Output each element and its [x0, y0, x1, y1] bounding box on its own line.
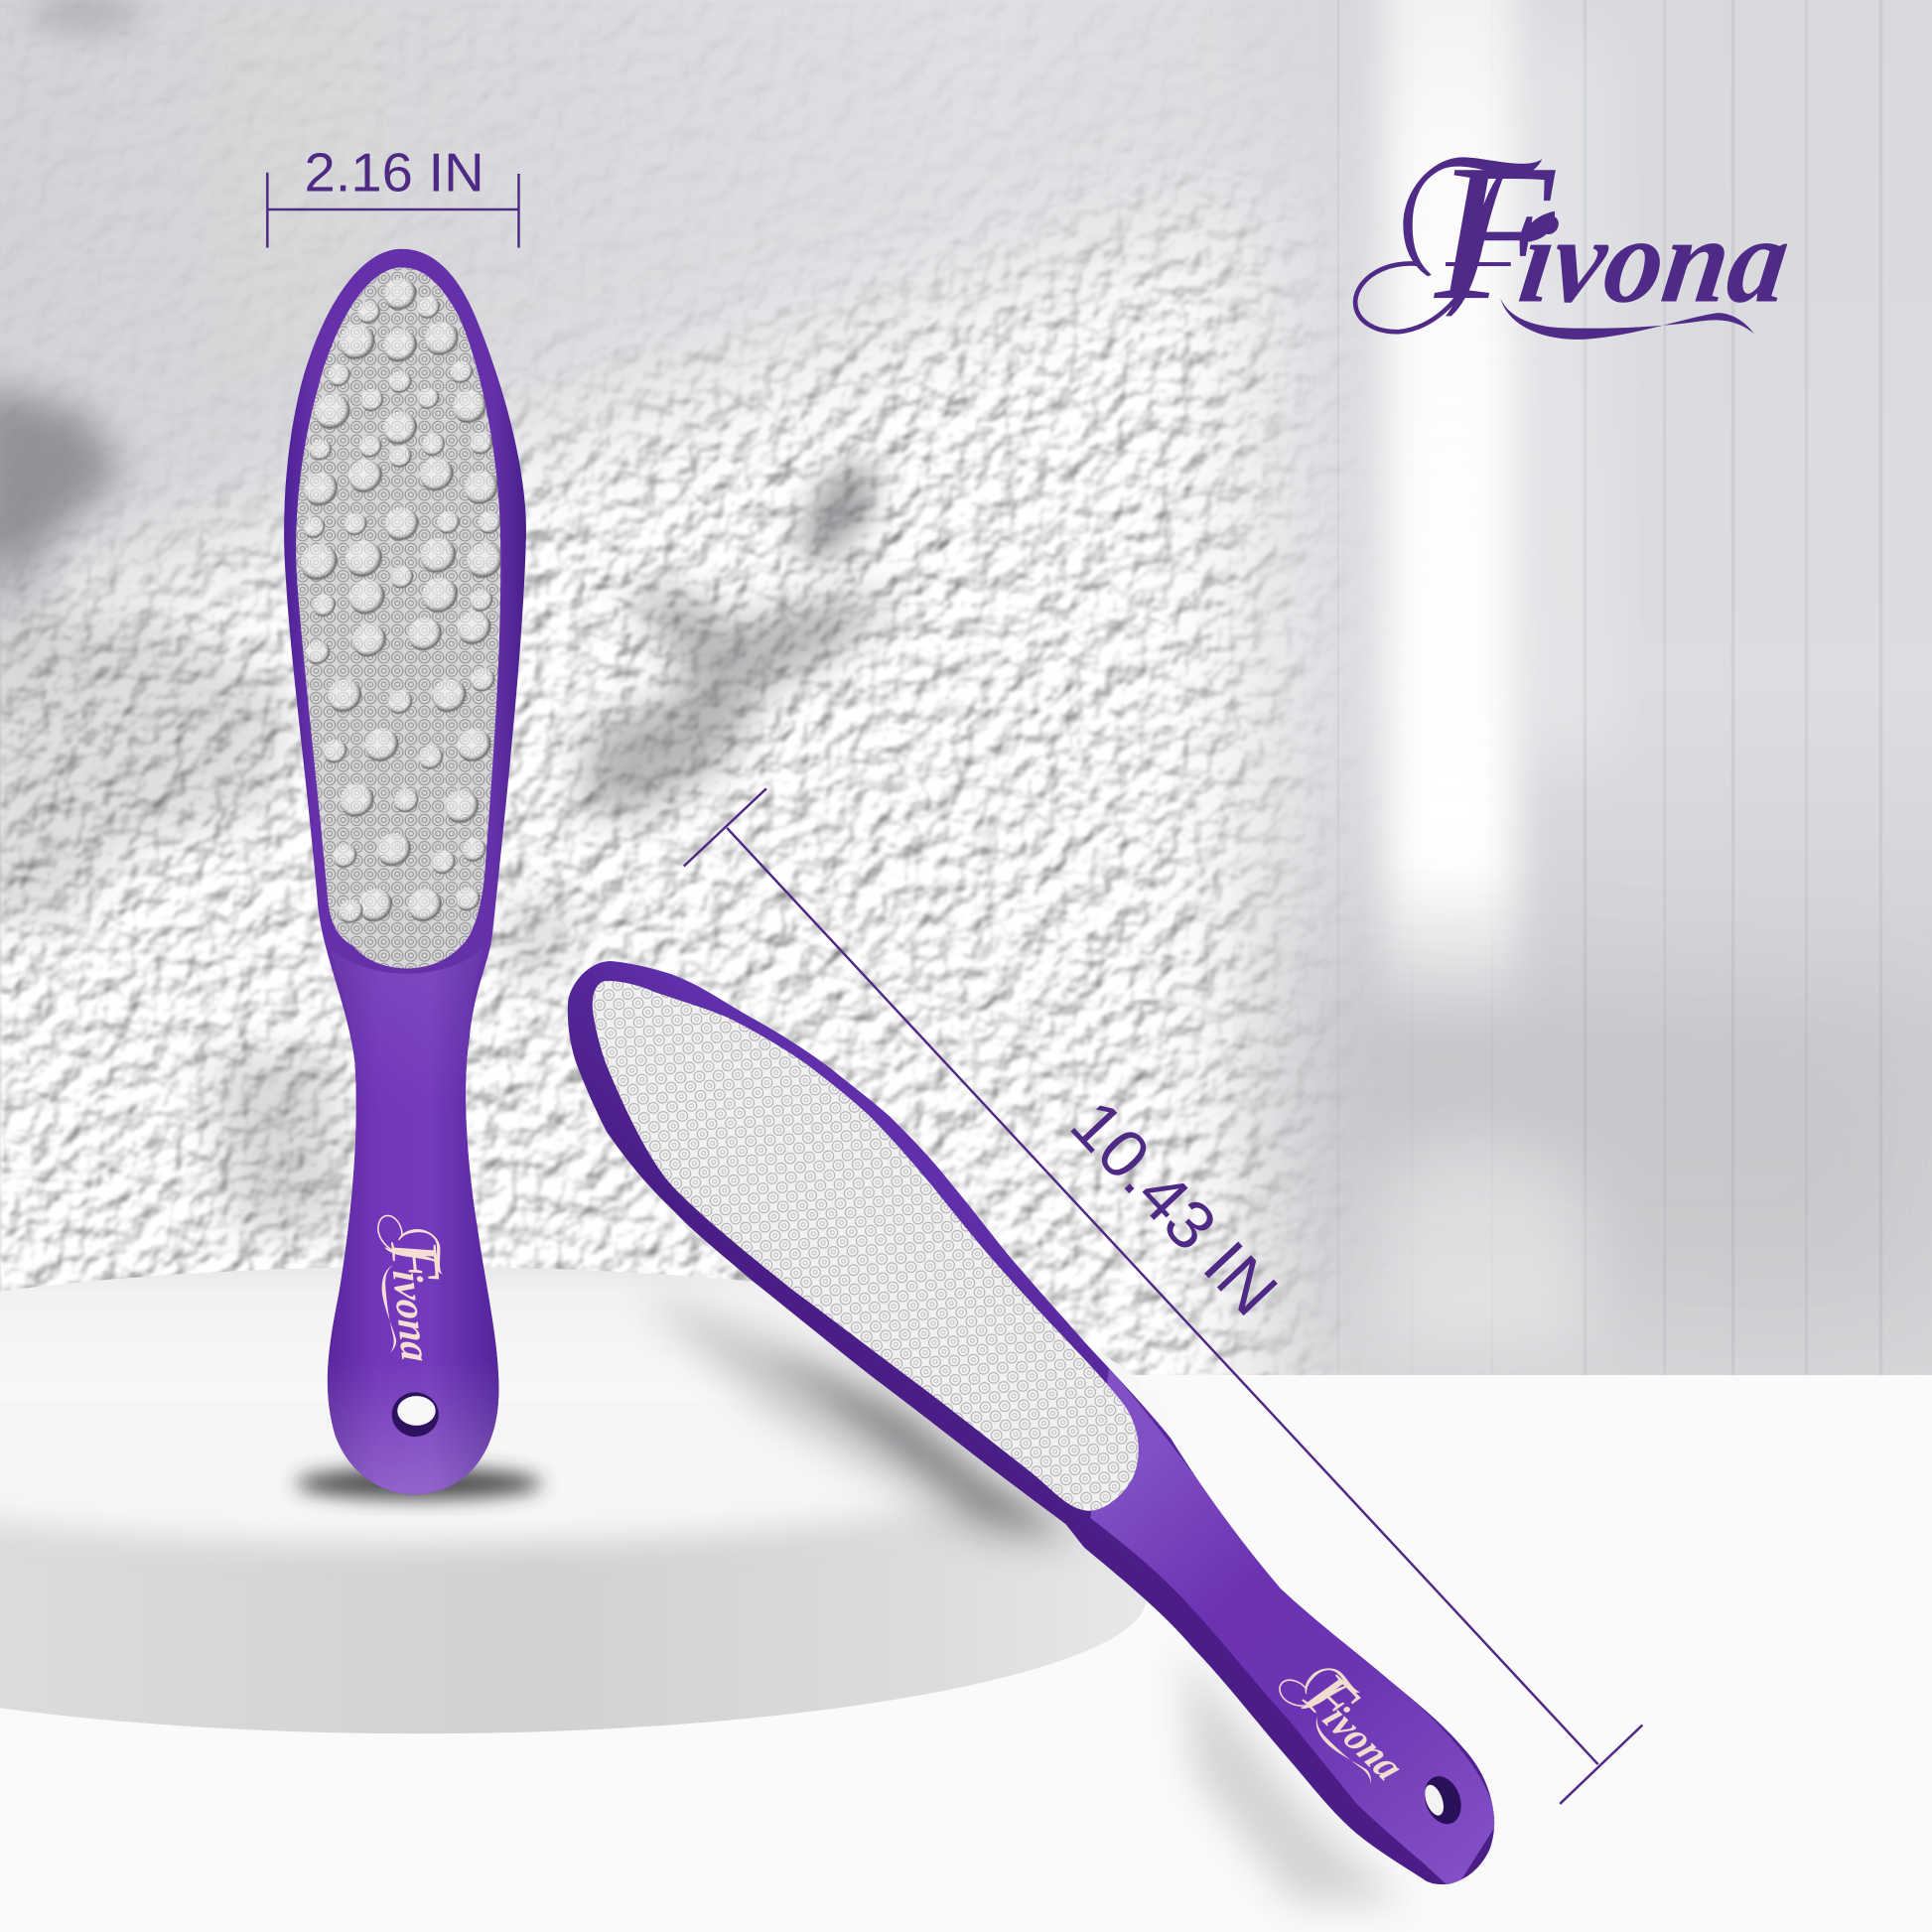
handle logo: F: [376, 1235, 455, 1286]
leaf shadows: [0, 0, 1932, 1330]
logo top flourish: [1403, 157, 1542, 276]
handle logo: F: [1291, 1658, 1371, 1739]
raised bumps: [301, 278, 503, 924]
shadow: diagonal file: [640, 1294, 1405, 1903]
floor: [0, 1375, 1932, 1932]
abrasive metal plate: [296, 267, 500, 969]
handle: [328, 949, 498, 1494]
product: diagonal foot file: [568, 961, 1497, 1891]
logo crossbar: [1446, 262, 1511, 266]
handle top surface: [1090, 1368, 1497, 1891]
logo letters ivona: ivona: [1512, 192, 1798, 328]
handle logo: ivona: [383, 1270, 440, 1362]
hanging hole: [1418, 1771, 1467, 1829]
handle logo: ivona: [1313, 1698, 1414, 1788]
light band on curtain: [1380, 0, 1601, 1343]
logo swoosh: [1500, 298, 1754, 340]
podium top: [0, 1267, 1146, 1401]
dimension label: 2.16 IN: [305, 142, 484, 203]
dimension line: [684, 788, 1642, 1804]
podium: [0, 1267, 1159, 1733]
shadow: vertical file: [296, 1467, 542, 1499]
abrasive metal plate: [593, 981, 1139, 1511]
logo stem swell: [1446, 174, 1504, 316]
logo lower loop: [1355, 263, 1472, 332]
logo leaf: [1525, 211, 1555, 241]
textured plaster wall: [0, 167, 1322, 1375]
curtain panel: [1232, 0, 1932, 1380]
file body: [284, 249, 526, 1494]
hanging hole: [392, 1392, 439, 1437]
handle logo: [1273, 1640, 1430, 1795]
podium side: [0, 1405, 1146, 1733]
product: vertical foot file: [284, 249, 526, 1494]
podium top soft edge: [0, 1405, 1146, 1555]
brand logo: Fivona: [1355, 124, 1798, 341]
logo letter F: F: [1433, 124, 1556, 341]
handle highlight: [328, 949, 498, 1494]
dimension label: 10.43 IN: [1056, 1086, 1292, 1329]
dark body and lower edge: [568, 961, 1494, 1884]
handle logo: [373, 1209, 464, 1368]
dimension line: [267, 173, 518, 247]
length dimension: 10.43 IN: [684, 788, 1642, 1804]
